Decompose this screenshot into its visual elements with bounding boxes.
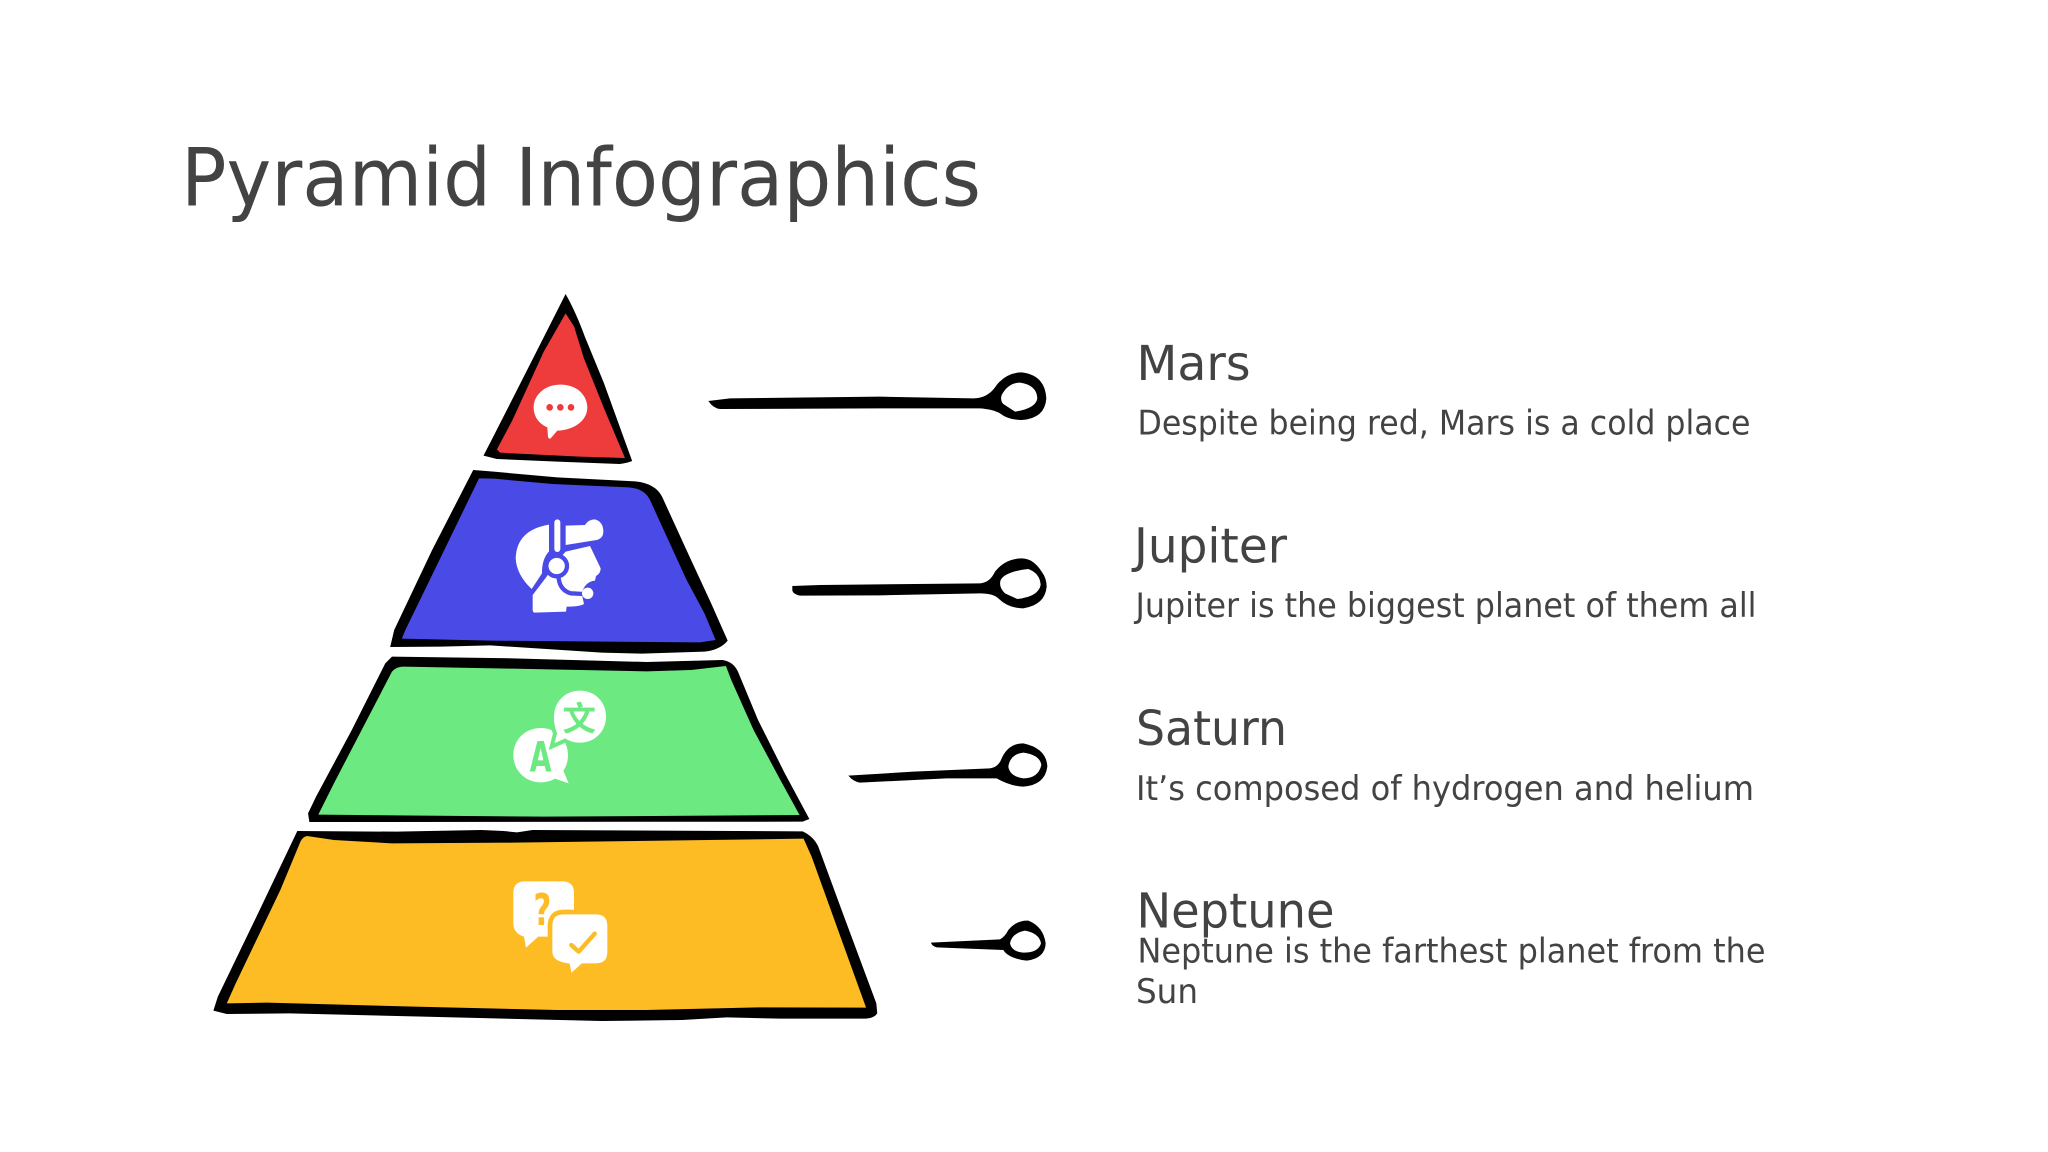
text block: Saturn: It’s composed of hydrogen and helium: [1136, 769, 1754, 809]
text block: Mars: [1136, 336, 1750, 444]
text block: Neptune: Neptune: [1136, 884, 1334, 940]
icon: question and answer bubbles: ?: [533, 886, 551, 936]
connector: Neptune pin: [931, 921, 1046, 961]
text block: Neptune: [1136, 884, 1766, 1012]
connector: Saturn pin: [848, 743, 1047, 787]
icon: translation bubbles: 文: [563, 692, 596, 741]
icon: question and answer bubbles: [513, 881, 610, 977]
text block: Mars: Despite being red, Mars is a cold place: [1138, 404, 1750, 444]
icon: translation bubbles: [513, 689, 608, 783]
tier: orange base: [213, 830, 877, 1021]
text block: Neptune: Neptune is the farthest planet from the: [1138, 932, 1766, 972]
text block: Jupiter: [1131, 519, 1756, 626]
text block: Saturn: Saturn: [1136, 701, 1287, 757]
connector: Mars pin: [708, 372, 1046, 420]
icon: speech bubble: [534, 385, 587, 439]
text block: Jupiter: Jupiter: [1131, 519, 1287, 575]
tier: green third: [308, 657, 809, 822]
icon: headset agent: [516, 519, 603, 613]
connector: Jupiter pin: [792, 558, 1047, 608]
text block: Neptune: Sun: [1136, 972, 1198, 1012]
text block: Jupiter: Jupiter is the biggest planet of them all: [1134, 586, 1756, 626]
text block: Mars: Mars: [1136, 336, 1250, 392]
title: Pyramid Infographics: [181, 132, 981, 225]
text block: Saturn: [1136, 701, 1754, 809]
tier: red top: [483, 294, 632, 464]
tier: blue second: [390, 470, 728, 654]
icon: translation bubbles: A: [530, 733, 552, 782]
pyramid: [213, 294, 877, 1021]
